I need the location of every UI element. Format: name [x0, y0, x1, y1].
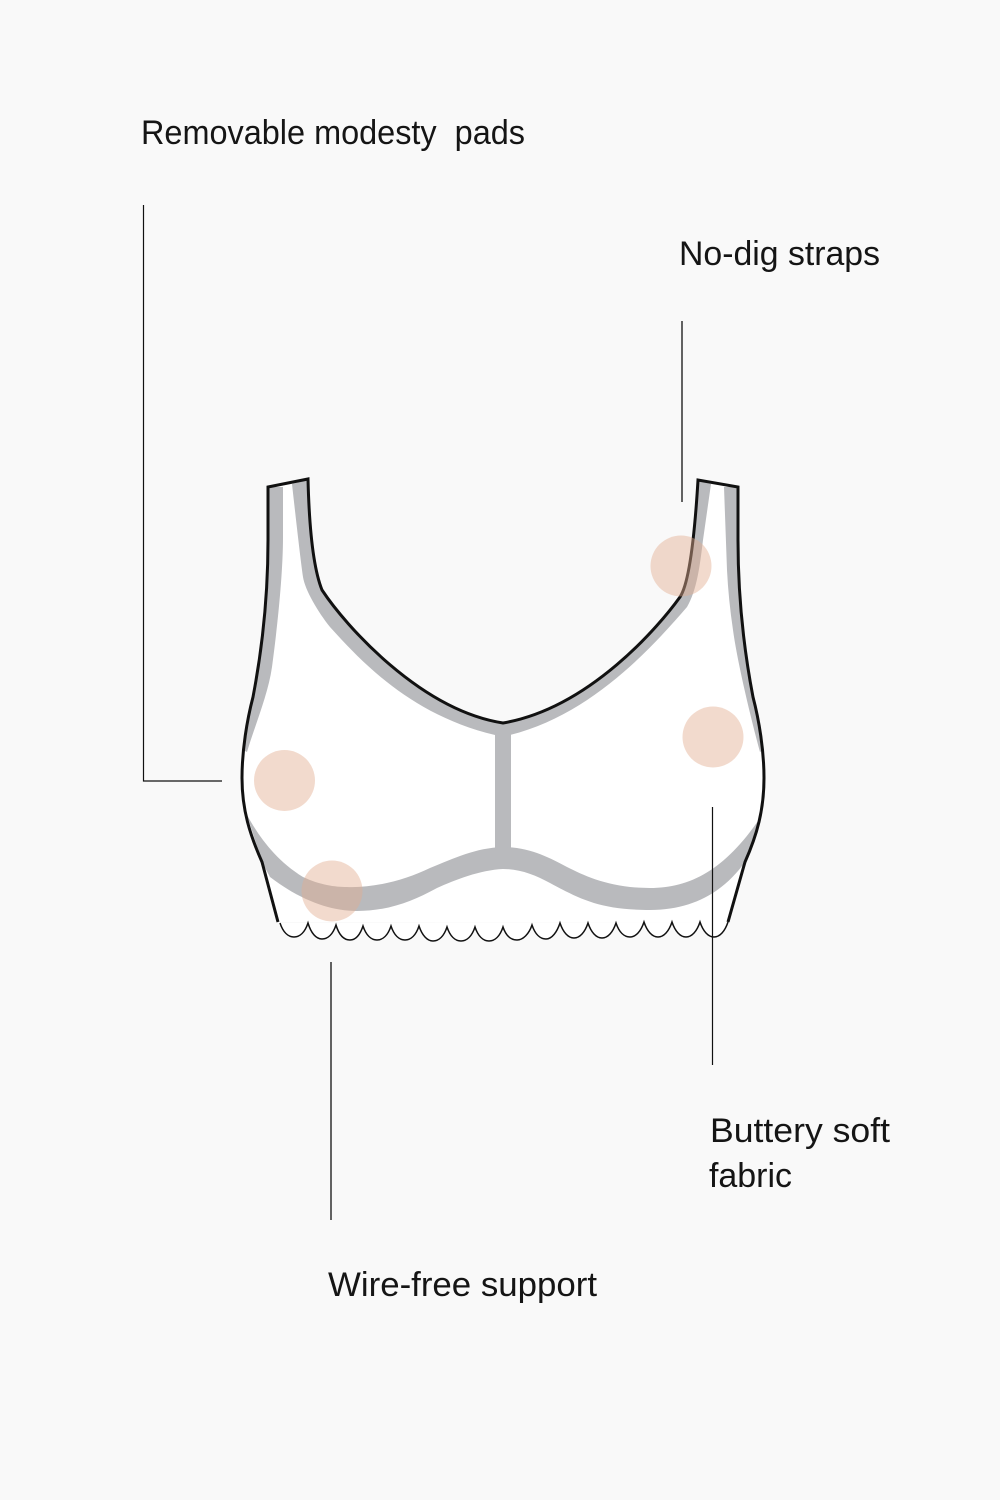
scalloped hem	[280, 922, 728, 941]
leader line: no-dig straps	[681, 321, 683, 502]
marker: buttery soft fabric	[682, 706, 744, 768]
label: removable modesty pads: Removable modesty pads	[141, 114, 525, 152]
callout markers	[254, 536, 744, 922]
neckline trim	[292, 480, 711, 735]
label: buttery soft fabric: fabric	[709, 1157, 792, 1195]
marker: modesty pads	[254, 750, 315, 811]
left strap trim	[243, 487, 283, 752]
center bar	[495, 732, 511, 857]
right strap trim	[724, 487, 763, 752]
underband trim	[247, 815, 760, 911]
grey trim	[243, 480, 763, 911]
label: no-dig straps: No-dig straps	[679, 235, 880, 273]
black outline	[242, 479, 764, 922]
label: buttery soft fabric	[709, 1112, 891, 1195]
white garment body	[242, 479, 764, 922]
garment illustration	[242, 479, 764, 941]
marker: wire-free support	[302, 860, 362, 922]
leader line: modesty pads	[144, 205, 222, 781]
label: buttery soft fabric: Buttery soft	[710, 1112, 891, 1150]
leader line: buttery soft fabric	[712, 807, 714, 1065]
label: wire-free support: Wire-free support	[328, 1266, 598, 1304]
leader line: wire-free support	[330, 962, 332, 1220]
marker: no-dig straps	[650, 536, 712, 596]
